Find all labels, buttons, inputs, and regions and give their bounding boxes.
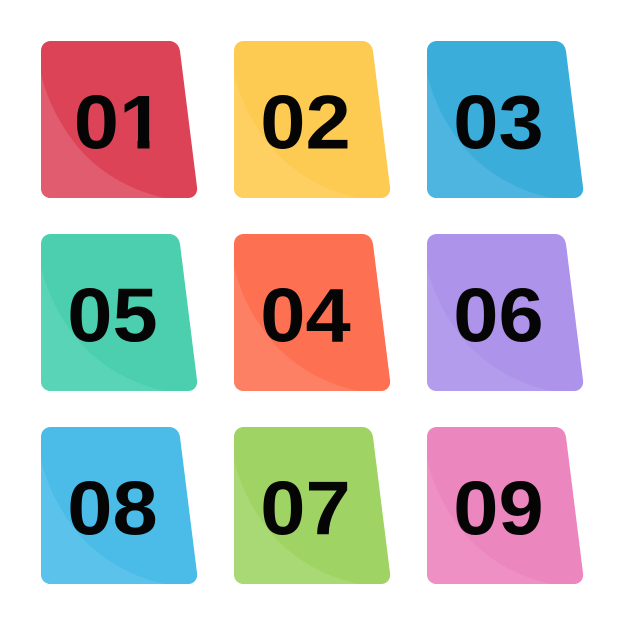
card 03: 03 [453, 80, 544, 165]
card 02: 02 [260, 80, 351, 165]
card 08: 08 [67, 466, 158, 551]
card 03 [427, 41, 583, 198]
card 08 [41, 427, 197, 584]
card 05: 05 [67, 273, 158, 358]
card 07: 07 [260, 466, 351, 551]
card 01: 01 [74, 80, 164, 165]
card 09 [427, 427, 583, 584]
card 07 [234, 427, 390, 584]
card 09: 09 [453, 466, 544, 551]
card 04: 04 [260, 273, 351, 358]
card 01 [41, 41, 197, 198]
card 02 [234, 41, 390, 198]
card 05 [41, 234, 197, 391]
card 06: 06 [453, 273, 544, 358]
card 04 [234, 234, 390, 391]
card 06 [427, 234, 583, 391]
